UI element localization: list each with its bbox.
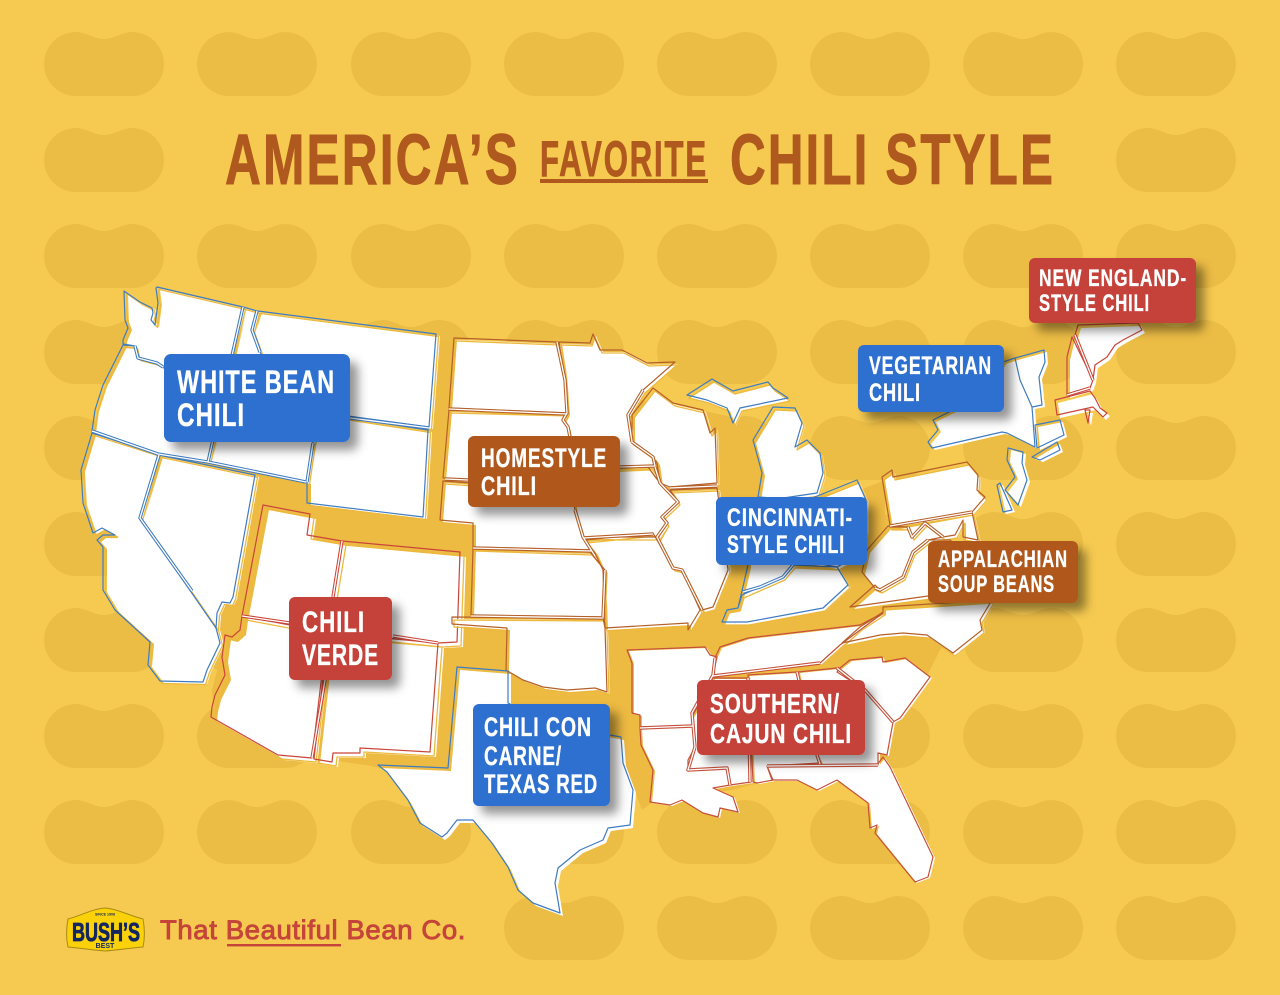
title	[225, 121, 1055, 200]
label: New England-style chili: STYLE CHILI	[1039, 290, 1150, 317]
label: Appalachian soup beans: SOUP BEANS	[938, 571, 1055, 598]
label: vegetarian chili: CHILI	[869, 379, 921, 407]
label: chili verde: VERDE	[302, 639, 379, 672]
label: New England-style chili: NEW ENGLAND-	[1039, 265, 1187, 292]
label: Southern / Cajun chili	[697, 680, 865, 755]
label: Cincinnati-style chili: CINCINNATI-	[727, 504, 853, 532]
label: white bean chili: CHILI	[177, 397, 245, 433]
label: homestyle chili: CHILI	[481, 471, 537, 501]
label: homestyle chili	[468, 436, 620, 507]
title: CHILI STYLE	[730, 121, 1055, 200]
logo: Bush's Best badge: BEST	[96, 943, 115, 950]
title: FAVORITE	[540, 131, 708, 187]
map shadow landmass	[150, 340, 990, 810]
label: white bean chili: WHITE BEAN	[177, 364, 335, 400]
label: vegetarian chili: VEGETARIAN	[869, 352, 992, 380]
title: AMERICA’S	[225, 121, 520, 200]
label: vegetarian chili	[858, 345, 1004, 412]
label: chili verde: CHILI	[302, 606, 365, 639]
map region: New England-style chili states	[1055, 323, 1145, 426]
map region: southern and Cajun chili states	[627, 613, 935, 883]
label: New England-style chili	[1029, 258, 1196, 323]
label: Southern / Cajun chili: SOUTHERN/	[710, 688, 840, 719]
label: Appalachian soup beans	[928, 541, 1078, 603]
label: chili con carne / Texas red: TEXAS RED	[484, 769, 598, 799]
label: white bean chili	[164, 354, 350, 442]
map region: Cincinnati-style chili states	[687, 379, 869, 625]
label: chili con carne / Texas red: CARNE/	[484, 741, 562, 771]
label: Southern / Cajun chili: CAJUN CHILI	[710, 718, 852, 749]
label: Cincinnati-style chili: STYLE CHILI	[727, 531, 845, 559]
label: chili con carne / Texas red: CHILI CON	[484, 712, 592, 742]
map region: white bean chili states (Pacific Northwest and Rockies)	[81, 287, 440, 684]
map region: Texas	[378, 667, 636, 916]
logo: Bush's Best badge: BUSH’S	[72, 917, 140, 947]
map region: vegetarian chili states (Northeast)	[928, 350, 1067, 514]
label: chili verde	[289, 597, 392, 680]
label: chili con carne / Texas red	[473, 704, 610, 806]
logo: Bush's Best badge	[66, 908, 144, 951]
label: Cincinnati-style chili	[716, 497, 867, 565]
map region: Appalachian soup beans states	[842, 462, 995, 656]
tagline: That Beautiful Bean Co.	[160, 915, 466, 945]
map region: homestyle chili states (Plains and Midwest)	[440, 334, 731, 695]
map region: chili verde states (Southwest)	[211, 505, 466, 767]
logo: Bush's Best badge: SINCE 1908	[95, 912, 115, 916]
label: homestyle chili: HOMESTYLE	[481, 443, 607, 473]
label: Appalachian soup beans: APPALACHIAN	[938, 546, 1068, 573]
